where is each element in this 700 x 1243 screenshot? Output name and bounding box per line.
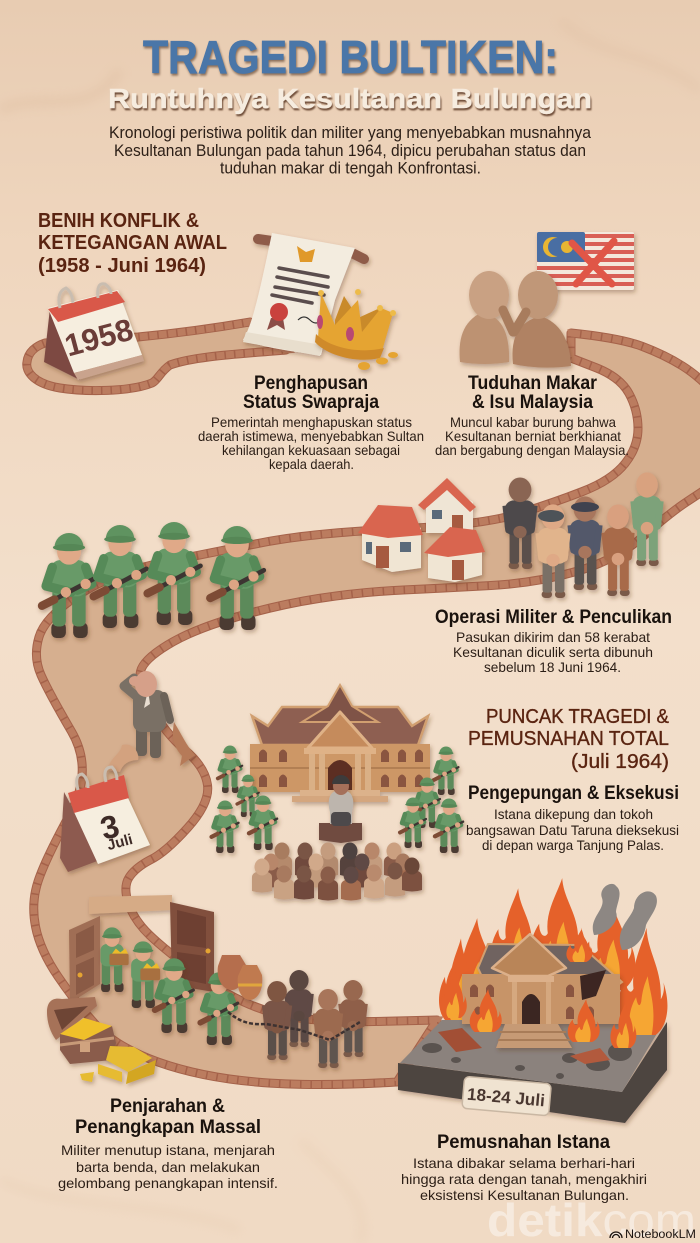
icon: burning palace building (462, 934, 622, 1048)
text: pengepungan dan eksekusi: Istana dikepung dan tokoh (494, 806, 653, 822)
icon: flames behind palace (439, 878, 667, 1035)
text: penjarahan: Militer menutup istana, menjarah (61, 1142, 275, 1158)
icon: soldiers with rifles (42, 522, 264, 638)
text: operasi militer (435, 607, 672, 675)
icon: malaysia flag crossed (537, 232, 634, 290)
icon: gold bars (80, 1046, 156, 1084)
intro text: Kesultanan Bulungan pada tahun 1964, dipicu perubahan status dan (114, 142, 586, 160)
icon: kneeling prisoner on pedestal (319, 775, 362, 843)
text: tuduhan makar: & Isu Malaysia (472, 392, 593, 413)
icon: calendar 3 juli (60, 767, 150, 872)
text: penghapusan status swapraja: Pemerintah menghapuskan status (211, 414, 412, 430)
text: penghapusan status swapraja: daerah istimewa, menyebabkan Sultan (198, 428, 424, 444)
text: operasi militer: Operasi Militer & Penculikan (435, 607, 672, 628)
intro text: tuduhan makar di tengah Konfrontasi. (220, 160, 481, 178)
text: penjarahan: barta benda, dan melakukan (76, 1159, 260, 1175)
text: pengepungan dan eksekusi (466, 783, 679, 853)
section heading: puncak tragedi: PEMUSNAHAN TOTAL (468, 728, 669, 750)
icon: chained prisoners (228, 970, 366, 1068)
section heading: puncak tragedi (468, 706, 670, 773)
section heading: puncak tragedi: PUNCAK TRAGEDI & (486, 706, 670, 728)
text: pemusnahan istana: Istana dibakar selama berhari-hari (413, 1155, 635, 1171)
icon: two figures whispering (460, 271, 571, 368)
text: pengepungan dan eksekusi: bangsawan Datu Taruna dieksekusi (466, 822, 679, 838)
text: penjarahan: Penjarahan & (110, 1096, 225, 1117)
icon: decree scroll (243, 233, 364, 356)
text: penjarahan (58, 1096, 278, 1191)
icon: treasure chest (47, 997, 116, 1064)
icon: calendar 1958: 1958 (61, 312, 137, 363)
text: tuduhan makar (435, 373, 629, 458)
icon: surrounding soldiers (211, 746, 463, 853)
text: pengepungan dan eksekusi: di depan warga Tanjung Palas. (482, 837, 664, 853)
logo: notebooklm: NotebookLM (625, 1229, 696, 1241)
icon: calendar 3 juli: 3 (96, 807, 123, 847)
text: penghapusan status swapraja: Status Swapraja (243, 392, 379, 413)
text: pemusnahan istana: Pemusnahan Istana (437, 1132, 610, 1153)
section heading: benih konflik: BENIH KONFLIK & (38, 210, 199, 232)
text: tuduhan makar: Tuduhan Makar (468, 373, 598, 394)
text: tuduhan makar: Muncul kabar burung bahwa (450, 414, 616, 430)
text: operasi militer: Kesultanan diculik serta dibunuh (453, 644, 653, 660)
text: penghapusan status swapraja: Penghapusan (254, 373, 368, 394)
section heading: puncak tragedi: (Juli 1964) (571, 751, 669, 773)
text: pemusnahan istana: hingga rata dengan tanah, mengakhiri (401, 1171, 647, 1187)
text: tuduhan makar: Kesultanan berniat berkhianat (445, 428, 621, 444)
label: 18-24 juli: 18-24 Juli (466, 1085, 546, 1110)
icon: houses (358, 478, 485, 582)
section heading: benih konflik: (1958 - Juni 1964) (38, 255, 206, 277)
intro text: Kronologi peristiwa politik dan militer yang menyebabkan musnahnya (109, 124, 592, 142)
text: pemusnahan istana: eksistensi Kesultanan Bulungan. (420, 1187, 629, 1203)
text: penghapusan status swapraja (198, 373, 424, 472)
icon: looting soldiers (100, 927, 238, 1045)
icon: smoke (593, 884, 657, 950)
icon: palace gate and doors (69, 895, 214, 1003)
title: TRAGEDI BULTIKEN: (143, 31, 558, 83)
icon: sultan figure (107, 671, 195, 772)
label: 18-24 juli (462, 1076, 551, 1116)
icon: crowd of townspeople (252, 842, 422, 900)
text: penghapusan status swapraja: kehilangan kekuasaan sebagai (222, 442, 400, 458)
text: operasi militer: sebelum 18 Juni 1964. (484, 659, 621, 675)
intro text (109, 124, 592, 178)
icon: clay jars (218, 955, 262, 1000)
text: penjarahan: gelombang penangkapan intensif. (58, 1175, 278, 1191)
icon: fallen crown (315, 289, 398, 370)
icon: burning palace base (398, 1020, 667, 1123)
icon: front flames (440, 929, 636, 1048)
section heading: benih konflik: KETEGANGAN AWAL (38, 232, 227, 254)
icon: calendar 3 juli: Juli (105, 831, 135, 854)
text: operasi militer: Pasukan dikirim dan 58 kerabat (456, 629, 650, 645)
road: winding main path (34, 333, 700, 1084)
text: penghapusan status swapraja: kepala daerah. (269, 456, 354, 472)
icon: calendar 1958 (44, 284, 144, 380)
text: tuduhan makar: dan bergabung dengan Malaysia. (435, 442, 629, 458)
icon: captured villagers (505, 472, 661, 598)
subtitle: Runtuhnya Kesultanan Bulungan (108, 83, 592, 114)
text: penjarahan: Penangkapan Massal (75, 1117, 261, 1138)
road: calendar pad (27, 322, 286, 391)
section heading: benih konflik (38, 210, 227, 277)
text: pemusnahan istana (401, 1132, 647, 1203)
text: pengepungan dan eksekusi: Pengepungan & Eksekusi (468, 783, 679, 804)
icon: palace (250, 685, 430, 802)
